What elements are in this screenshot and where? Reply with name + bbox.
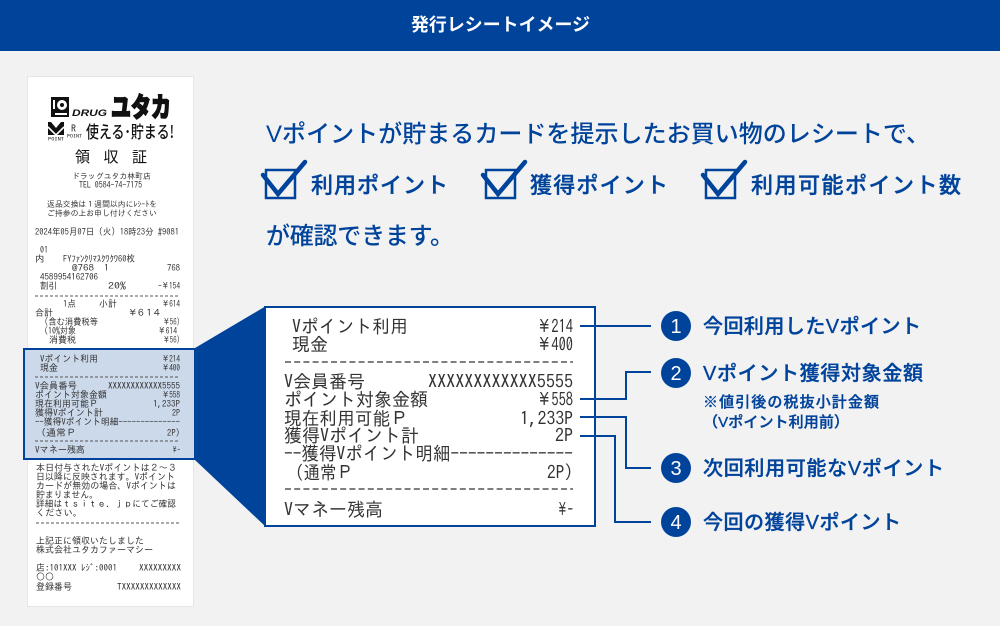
date line: 2024年05月07日（火）18時23分 #9081 <box>35 227 179 237</box>
footer info: 登録番号 <box>36 582 72 592</box>
icon: R point: R <box>71 124 76 134</box>
panel: full receipt <box>24 76 195 606</box>
callout 3: 次回利用可能なVポイント <box>703 457 944 480</box>
totals: ¥６１４ <box>128 308 162 318</box>
highlighted V point section: ポイント対象金額 <box>35 390 107 400</box>
panel: zoomed receipt detail: 1,233P <box>520 410 573 428</box>
highlighted V point section: ¥558 <box>162 391 180 400</box>
totals: ¥56) <box>163 336 180 345</box>
callout 2: 2 <box>670 363 682 385</box>
callout 2: （Vポイント利用前） <box>703 414 849 431</box>
header bar <box>0 0 1000 51</box>
intro text end: が確認できます。 <box>266 223 454 250</box>
footer info: ○○ <box>36 573 54 582</box>
checklist item: 利用可能ポイント数 <box>703 162 961 198</box>
logo: Drug Yutaka: DRUG <box>72 108 108 119</box>
return notice: 返品交換は１週間以内にﾚｼｰﾄを <box>47 200 157 209</box>
panel: zoomed receipt detail: --獲得Vポイント明細-------------- <box>284 444 573 463</box>
checklist item: 利用ポイント <box>263 162 448 198</box>
point notes: 本日付与されたVポイントは２～３ <box>36 463 177 473</box>
panel: zoomed receipt detail: ¥400 <box>537 336 573 354</box>
highlighted V point section: V会員番号 <box>35 381 77 391</box>
return notice <box>47 200 157 218</box>
purchase items: 20% <box>108 281 126 291</box>
callout 2: Vポイント獲得対象金額 <box>703 362 923 385</box>
intro text: Vポイントが貯まるカードを提示したお買い物のレシートで、 <box>266 121 930 148</box>
footer info <box>36 536 181 592</box>
store info <box>72 172 151 190</box>
icon: checkbox 3 <box>703 162 745 198</box>
icon: V point <box>48 122 65 142</box>
callout 4: 今回の獲得Vポイント <box>703 511 901 534</box>
footer info: 株式会社ユタカファーマシー <box>36 545 153 555</box>
highlighted V point section: Vポイント利用 <box>40 354 98 364</box>
highlighted V point section: 現金 <box>40 363 58 373</box>
panel: zoomed receipt detail: 獲得Vポイント計 <box>284 426 419 445</box>
totals: 小計 <box>99 299 117 309</box>
point notes: 日以降に反映されます。Vポイント <box>36 472 175 482</box>
highlighted V point section: ¥400 <box>162 364 180 373</box>
totals: 1点 <box>63 299 76 309</box>
totals: （10%対象 <box>40 326 76 336</box>
callout 2 <box>661 358 923 431</box>
panel: zoomed receipt detail: ¥- <box>557 501 573 519</box>
panel: zoomed receipt detail: ¥214 <box>537 318 573 336</box>
callout 2: ※値引後の税抜小計金額 <box>703 394 879 411</box>
panel: zoomed receipt detail: 2P) <box>547 463 573 482</box>
callout 3: 3 <box>670 458 682 480</box>
panel: zoomed receipt detail: ¥558 <box>537 391 573 409</box>
point notes: 詳細はｔｓｉｔｅ．ｊｐにてご確認 <box>36 499 176 509</box>
return notice: ご持参の上お申し付けください <box>47 209 157 218</box>
store info: TEL 0584-74-7175 <box>79 181 142 190</box>
totals: ¥614 <box>158 327 177 336</box>
footer info: XXXXXXXXX <box>139 564 181 573</box>
totals: 合計 <box>35 308 53 318</box>
header title: 発行レシートイメージ <box>411 15 590 35</box>
panel: zoomed receipt detail: V会員番号 <box>284 373 365 391</box>
highlighted V point section: 2P) <box>167 429 180 438</box>
panel: zoomed receipt detail: Vポイント利用 <box>292 317 408 336</box>
totals: ¥56) <box>163 318 180 327</box>
purchase items: @768 <box>72 264 94 273</box>
totals: （含む消費税等 <box>40 317 98 327</box>
purchase items: 768 <box>167 264 180 273</box>
icon: checkbox 1 <box>263 162 305 198</box>
point notes <box>36 463 180 523</box>
purchase items: -¥154 <box>158 282 180 291</box>
panel: zoomed receipt detail: XXXXXXXXXXXX5555 <box>428 373 573 391</box>
checklist item: 利用可能ポイント数: 利用可能ポイント数 <box>751 173 961 198</box>
callout 1 <box>661 311 921 341</box>
highlighted V point section: 1,233P <box>153 400 180 409</box>
panel: zoomed receipt detail: 現金 <box>292 335 328 354</box>
purchase items: 内 <box>35 255 44 264</box>
callout 4 <box>661 507 901 537</box>
callout 3 <box>661 453 944 483</box>
highlighted V point section: ¥- <box>172 446 180 455</box>
receipt title: 領 収 証 <box>75 146 147 167</box>
totals: ¥614 <box>162 300 180 309</box>
highlighted V point section: XXXXXXXXXXXX5555 <box>108 382 180 391</box>
zoom connector <box>195 306 266 527</box>
highlighted V point section: --獲得Vポイント明細-------------- <box>35 417 180 427</box>
panel: zoomed receipt detail: Vマネー残高 <box>284 500 383 519</box>
highlighted V point section: 獲得Vポイント計 <box>35 408 103 418</box>
purchase items: 01 <box>40 246 48 255</box>
icon: R point: POINT <box>67 134 83 139</box>
panel: zoomed receipt detail <box>265 307 595 526</box>
footer info: 上記正に領収いたしました <box>36 536 144 546</box>
panel: zoomed receipt detail: 2P <box>555 427 573 445</box>
logo: Drug Yutaka: ユタカ <box>111 86 171 125</box>
panel: zoomed receipt detail: （通常Ｐ <box>287 463 353 482</box>
icon: R point <box>67 124 83 139</box>
purchase items: FYﾌｧﾝｸﾘﾏｽｸﾜｸﾜ60枚 <box>63 254 135 264</box>
purchase items: 4589954162706 <box>40 273 98 282</box>
footer info: 店:101XXX ﾚｼﾞ:0001 <box>36 563 117 573</box>
footer info: TXXXXXXXXXXXXX <box>117 583 181 592</box>
icon: checkbox 2 <box>483 162 525 198</box>
leader lines <box>580 326 651 522</box>
point notes: カードが無効の場合、Vポイントは <box>36 480 176 491</box>
checklist item: 獲得ポイント: 獲得ポイント <box>530 173 668 198</box>
checklist item: 利用ポイント: 利用ポイント <box>311 173 448 198</box>
point notes: ください。 <box>36 508 82 518</box>
highlighted V point section: Vマネー残高 <box>35 445 85 455</box>
highlighted V point section: ¥214 <box>162 355 180 364</box>
highlighted V point section: 2P <box>172 409 180 418</box>
totals: 消費税 <box>49 335 76 345</box>
store info: ドラッグユタカ林町店 <box>72 172 151 180</box>
point slogan: 使える･貯まる! <box>86 118 174 143</box>
purchase items <box>35 246 180 296</box>
point notes: 貯まりません。 <box>36 490 98 500</box>
callout 4: 4 <box>670 512 682 534</box>
callout 1: 1 <box>670 316 682 338</box>
icon: V point: POINT <box>48 137 65 142</box>
highlighted V point section: 現在利用可能Ｐ <box>35 398 98 409</box>
checklist item: 獲得ポイント <box>483 162 668 198</box>
highlighted V point section: （通常Ｐ <box>36 428 76 438</box>
highlighted V point section <box>24 349 195 459</box>
callout 1: 今回利用したVポイント <box>703 315 921 338</box>
panel: zoomed receipt detail: 現在利用可能Ｐ <box>284 409 408 428</box>
logo: Drug Yutaka <box>51 86 171 125</box>
purchase items: 割引 <box>40 281 57 291</box>
panel: zoomed receipt detail: ポイント対象金額 <box>284 390 428 409</box>
totals <box>35 299 180 345</box>
purchase items: 1 <box>104 264 109 273</box>
